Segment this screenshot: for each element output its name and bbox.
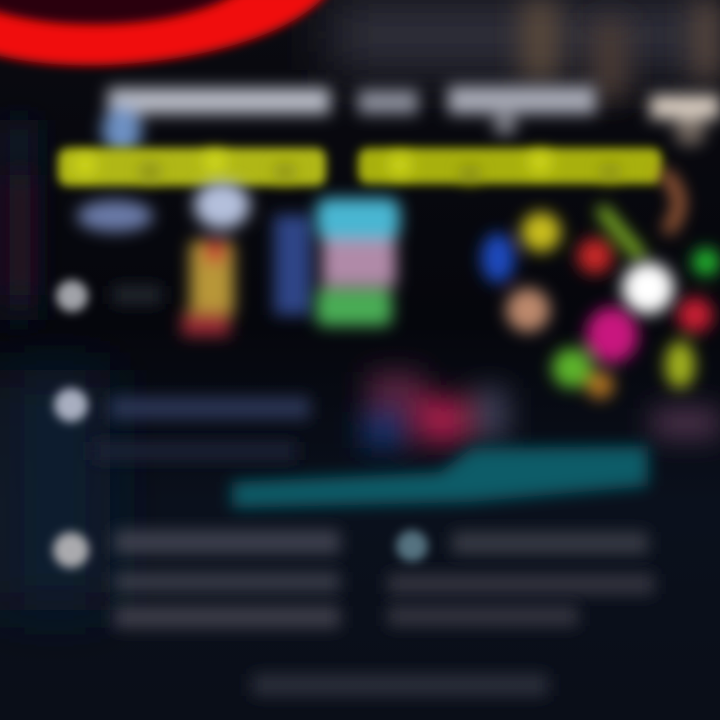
teal banner	[232, 446, 648, 508]
footer line	[252, 674, 548, 696]
bullet 3	[53, 530, 654, 628]
bullet 1	[56, 280, 162, 312]
bullet 2	[54, 388, 310, 460]
illustration: colourful tower	[316, 198, 400, 326]
title line one	[102, 86, 720, 154]
illustration: small figures	[77, 181, 312, 336]
title line two (yellow)	[58, 148, 662, 186]
red arc logo	[0, 0, 330, 65]
illustration: colour burst	[481, 172, 720, 399]
crowd of people	[362, 372, 720, 448]
